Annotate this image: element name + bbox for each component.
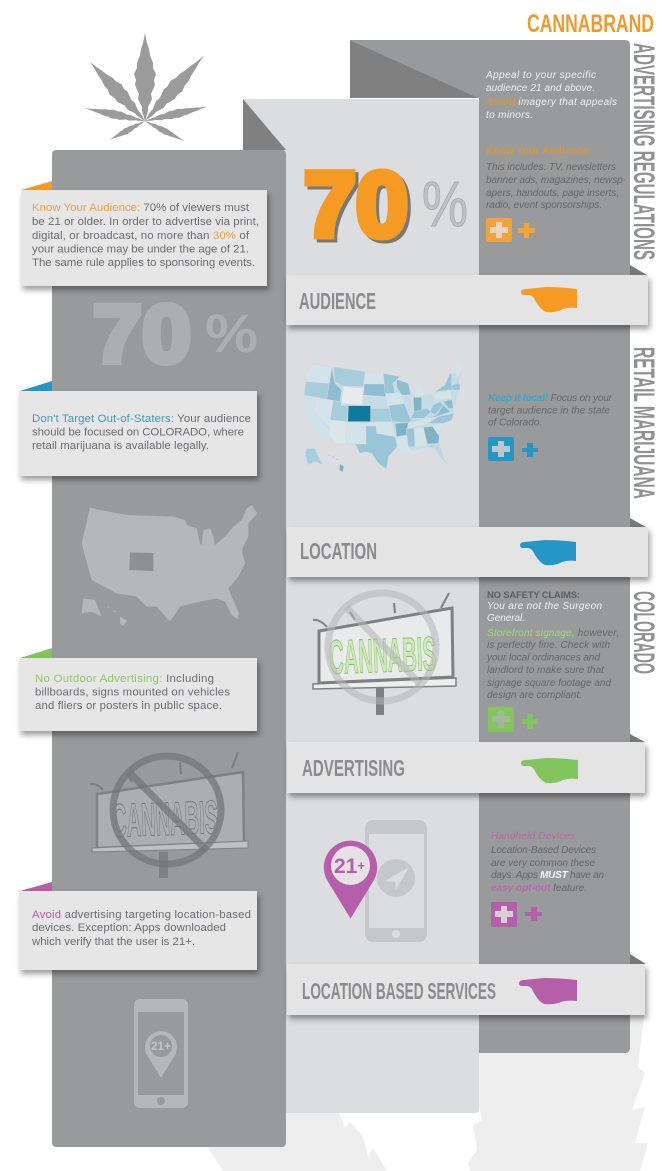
- callout: avoid location-based: which verify that the user is 21+.: [31, 936, 195, 948]
- band: location based services: [287, 964, 645, 1015]
- phone with location pin: [324, 820, 427, 942]
- callout: know your audience: your audience may be under the age of 21.: [32, 244, 249, 256]
- callout: out of staters: retail marijuana is available legally.: [32, 440, 209, 452]
- text: appeal: to minors.: [486, 110, 533, 121]
- panel: center: [243, 99, 479, 1113]
- callout: avoid location-based: [19, 882, 257, 970]
- band: audience: AUDIENCE: [299, 288, 376, 314]
- callout: no outdoor advertising: billboards, signs mounted on vehicles: [35, 686, 230, 698]
- text: know your audience: radio, event sponsorships.: [486, 200, 602, 211]
- text: keep it local: target audience in the state: [488, 406, 610, 416]
- callout: know your audience: Know Your Audience: 70% of viewers must: [32, 202, 250, 214]
- phone: gray: 21+: [151, 1041, 171, 1053]
- callout: avoid location-based: Avoid advertising targeting location-based: [32, 909, 251, 921]
- band: location: [287, 527, 648, 577]
- big stat: 70 percent: 70: [304, 154, 408, 256]
- text: handheld devices: easy opt-out feature.: [491, 883, 587, 894]
- callout: know your audience: The same rule applies to sponsoring events.: [32, 257, 255, 269]
- text: know your audience: banner ads, magazines, newsp-: [486, 175, 627, 186]
- text: no safety claims: You are not the Surgeon: [487, 601, 602, 612]
- text: no safety claims: design are compliant.: [487, 690, 582, 701]
- big stat: 70 percent: [304, 154, 468, 259]
- text: keep it local: Keep it local! Focus on your: [488, 393, 613, 404]
- band: location based services: LOCATION BASED SERVICES: [302, 978, 496, 1004]
- text: know your audience: apers, handouts, page inserts,: [486, 188, 619, 199]
- text: no safety claims: landlord to make sure that: [487, 665, 605, 676]
- billboard: gray: CANNABIS: [111, 790, 219, 847]
- icon: green plus: [488, 707, 538, 732]
- callout: know your audience: digital, or broadcast, no more than 30% of: [32, 230, 250, 242]
- billboard: colored: CANNABIS: [328, 628, 437, 685]
- band: advertising: ADVERTISING: [302, 755, 405, 781]
- side title: retail marijuana: RETAIL MARIJUANA: [627, 347, 660, 499]
- big stat: 70 percent: 70: [307, 157, 411, 259]
- text: keep it local: of Colorado.: [488, 418, 542, 428]
- text: handheld devices: [491, 831, 604, 894]
- text: no safety claims: [486, 590, 619, 701]
- text: no safety claims: General.: [487, 613, 525, 624]
- text: no safety claims: NO SAFETY CLAIMS:: [487, 590, 580, 601]
- watermark: 70 percent: 70: [93, 289, 191, 380]
- callout: know your audience: [21, 181, 267, 286]
- band: location: LOCATION: [300, 538, 377, 564]
- big stat: 70 percent: %: [422, 168, 468, 240]
- icon: purple plus: [491, 902, 542, 927]
- callout: avoid location-based: devices. Exception: Apps downloaded: [32, 922, 226, 934]
- text: handheld devices: days. Apps MUST have an: [491, 870, 604, 881]
- us map: gray: [82, 505, 257, 626]
- text: handheld devices: are very common these: [491, 858, 595, 869]
- panel: left: [52, 150, 286, 1147]
- callout: know your audience: be 21 or older. In order to advertise via print,: [32, 216, 259, 228]
- text: COLORADO: [627, 591, 660, 674]
- panel: center fold: [243, 99, 286, 150]
- callout: no outdoor advertising: [19, 648, 257, 731]
- callout: no outdoor advertising: and fliers or posters in public space.: [35, 700, 222, 712]
- text: handheld devices: Handheld Devices: [491, 831, 575, 842]
- text: appeal: Avoid imagery that appeals: [485, 97, 617, 108]
- text: no safety claims: is perfectly fine. Check with: [487, 640, 610, 651]
- side title: advertising regulations: ADVERTISING REGULATIONS: [627, 43, 660, 260]
- icon: orange plus: [486, 218, 535, 242]
- icon: cannabis leaf: [84, 33, 210, 144]
- text: know your audience: Know Your Audience:: [486, 146, 592, 157]
- text: handheld devices: Location-Based Devices: [491, 845, 596, 856]
- callout: out of staters: Don't Target Out-of-Staters: Your audience: [32, 413, 251, 425]
- billboard: gray: [90, 752, 248, 878]
- fold triangles: [630, 265, 647, 964]
- text: no safety claims: signage square footage and: [487, 678, 611, 689]
- panel: right fold: [350, 40, 479, 98]
- text: keep it local: [488, 393, 613, 428]
- watermark: 70 percent: %: [205, 304, 258, 364]
- text: appeal: [485, 70, 617, 121]
- panel: right: [350, 40, 630, 1053]
- icon: blue plus: [488, 437, 538, 461]
- text: know your audience: [486, 146, 627, 211]
- callout: out of staters: [19, 381, 257, 476]
- background leaf: [208, 1010, 648, 1171]
- callout: no outdoor advertising: No Outdoor Advertising: Including: [35, 673, 214, 685]
- text: know your audience: This includes: TV, newsletters: [486, 162, 616, 173]
- band: audience: [286, 275, 648, 325]
- billboard: colored: [313, 593, 456, 715]
- text: no safety claims: your local ordinances and: [486, 652, 600, 664]
- us map: colored: [304, 360, 463, 472]
- phone with location pin: +: [357, 858, 365, 873]
- phone: gray: [134, 999, 188, 1108]
- text: appeal: Appeal to your specific: [485, 70, 596, 81]
- band: advertising: [287, 742, 645, 793]
- phone with location pin: 21: [334, 855, 357, 878]
- text: appeal: audience 21 and above.: [486, 83, 595, 94]
- callout: out of staters: should be focused on COLORADO, where: [32, 426, 244, 438]
- watermark: 70 percent: [93, 289, 258, 380]
- text: no safety claims: Storefront signage, however,: [487, 628, 619, 639]
